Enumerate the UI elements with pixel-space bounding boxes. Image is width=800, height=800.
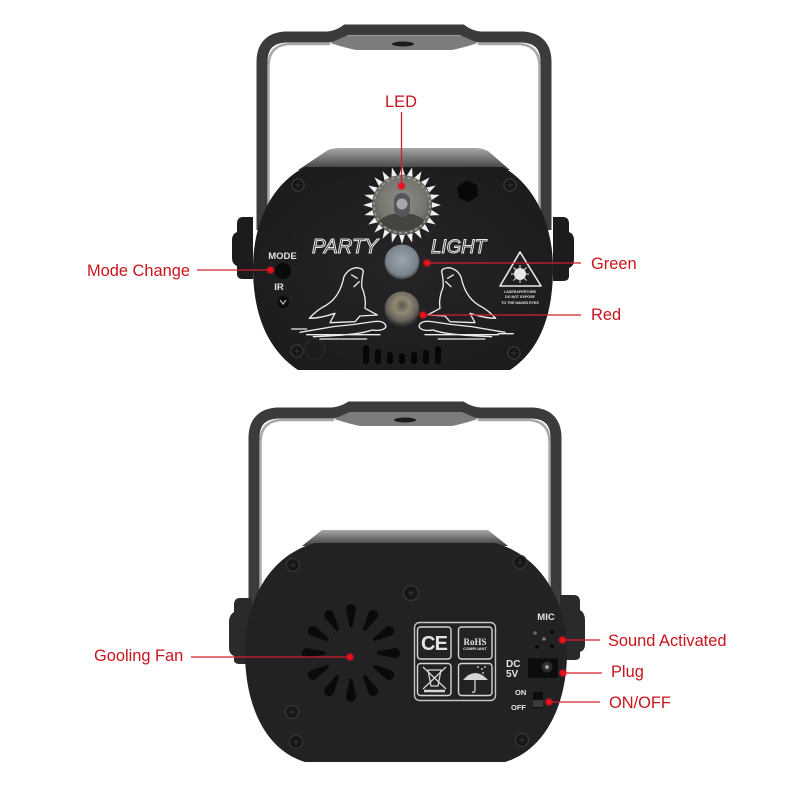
recycling bin mark — [418, 664, 451, 696]
right knob (bottom unit) — [560, 595, 585, 660]
IR receiver — [277, 296, 289, 308]
device: bottom unit rear view — [229, 407, 585, 762]
red laser window — [384, 292, 420, 326]
mounting bracket (top unit) — [262, 30, 546, 230]
mode button — [275, 263, 291, 279]
callout: Sound Activated: Sound Activated — [608, 632, 726, 650]
MODE text: MODE — [268, 251, 297, 262]
callout: Gooling Fan: Gooling Fan — [94, 647, 183, 665]
PARTY lettering: PARTY — [312, 236, 380, 258]
screws (bottom unit) — [286, 556, 528, 748]
faceplate (top unit) — [253, 167, 553, 370]
laser warning label: LASERAPERTURE — [504, 290, 537, 294]
DC power socket — [528, 658, 558, 678]
vent slots — [363, 345, 441, 364]
DC 5V text — [506, 659, 520, 680]
RoHS mark: RoHS — [463, 637, 487, 647]
callout: Green — [422, 255, 637, 273]
left seal illustration — [292, 268, 386, 339]
certification label — [414, 622, 496, 700]
faint mark on faceplate — [305, 339, 325, 359]
RoHS mark — [458, 627, 492, 659]
DC 5V text: 5V — [506, 669, 519, 680]
housing top surface (bottom unit) — [302, 530, 508, 546]
callout: Red — [418, 306, 621, 324]
callout: Plug — [558, 663, 644, 681]
RoHS mark: COMPLIANT — [463, 646, 487, 651]
green laser window — [384, 244, 420, 280]
callout: Gooling Fan — [94, 647, 354, 665]
power switch — [533, 692, 543, 708]
callout: Mode Change: Mode Change — [87, 262, 190, 280]
IR text: IR — [274, 282, 284, 293]
LIGHT lettering: LIGHT — [431, 237, 487, 258]
CE mark: CE — [421, 633, 448, 655]
left knob (bottom unit) — [229, 598, 252, 664]
MIC text: MIC — [537, 612, 555, 623]
right seal illustration — [419, 268, 513, 339]
housing top surface (top unit) — [298, 148, 510, 170]
device: top unit front view — [232, 30, 574, 370]
screws (top unit) — [291, 179, 520, 359]
callout: LED: LED — [385, 93, 417, 111]
mounting bracket (bottom unit) — [254, 407, 556, 610]
LED starburst — [363, 166, 441, 244]
laser warning label: TO THE NAKED EYES — [501, 301, 539, 305]
keep dry umbrella mark — [458, 664, 492, 696]
callout: ON/OFF — [544, 694, 671, 712]
callout: Plug: Plug — [611, 663, 644, 681]
faceplate (bottom unit) — [245, 543, 567, 762]
callout: Red: Red — [591, 306, 621, 324]
OFF text: OFF — [511, 703, 526, 712]
cooling fan vents — [302, 604, 400, 702]
callout: ON/OFF: ON/OFF — [609, 694, 671, 712]
laser warning label: DO NOT EXPOSE — [505, 295, 535, 299]
microphone holes — [533, 630, 554, 649]
ON text: ON — [515, 688, 526, 697]
callout: LED — [385, 93, 417, 190]
laser warning label — [500, 252, 541, 305]
DC 5V text: DC — [506, 659, 520, 670]
hexagonal sensor port — [457, 180, 478, 202]
callout: Green: Green — [591, 255, 637, 273]
left knob (top unit) — [232, 217, 253, 279]
callout: Mode Change — [87, 262, 275, 280]
right knob (top unit) — [553, 217, 574, 281]
